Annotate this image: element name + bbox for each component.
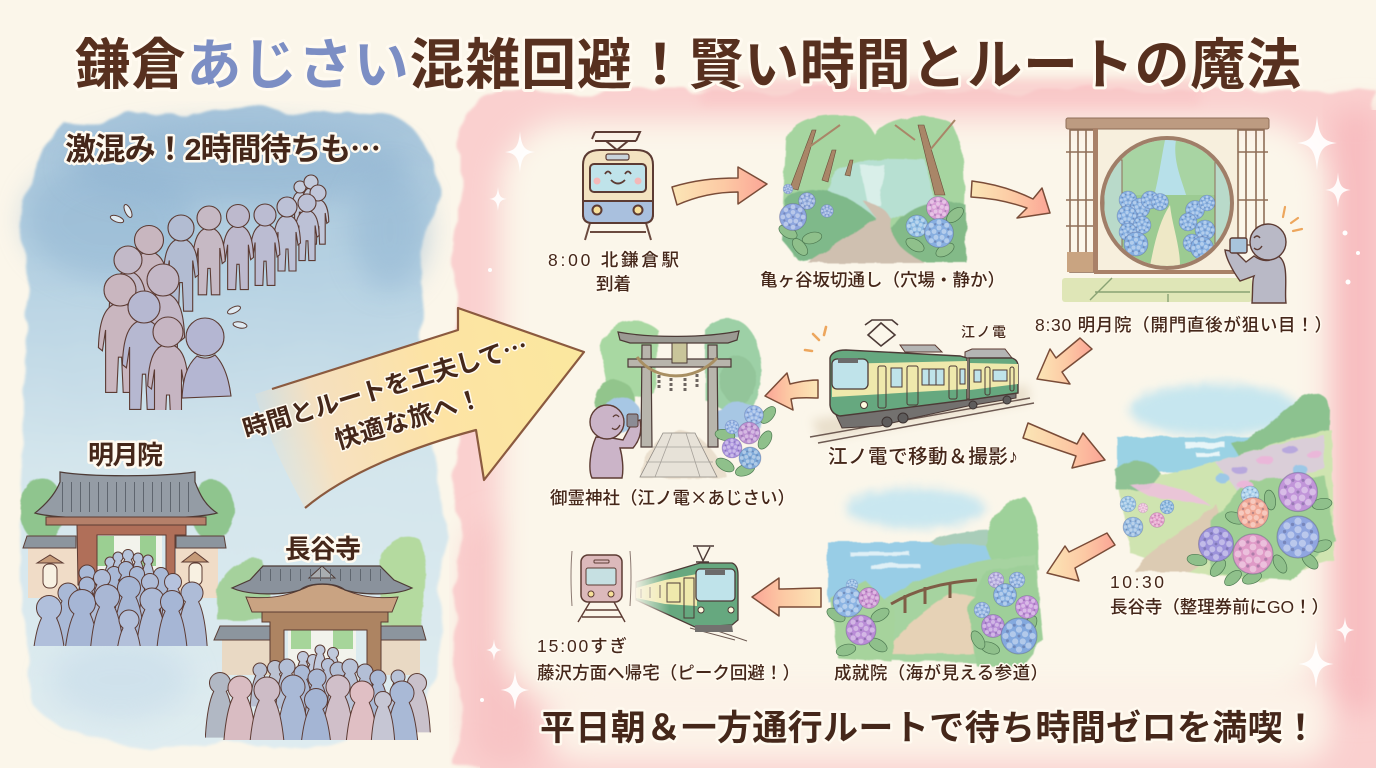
arrow: to Hase-dera bbox=[1023, 423, 1105, 468]
illustration: Hase-dera hydrangea slope bbox=[1115, 384, 1335, 589]
text: Enoden sign: 江ノ電 bbox=[961, 324, 1006, 340]
illustration: Meigetsu-in round window bbox=[1062, 118, 1302, 303]
text: return caption bbox=[537, 636, 800, 683]
arrow: to Kamegayatsu bbox=[672, 167, 767, 205]
text: Meigetsu-in caption: 8:30 明月院（開門直後が狙い目！） bbox=[1035, 315, 1332, 335]
illustration: Kamegayatsu pass bbox=[777, 115, 966, 263]
illustration: Jojuin sea approach bbox=[825, 488, 1043, 668]
heading: crowded warning: 激混み！2時間待ちも… bbox=[65, 124, 381, 169]
panel: pink route frame bbox=[456, 78, 1376, 768]
icon: right lantern bbox=[182, 552, 208, 585]
figure: person photographing bbox=[1225, 224, 1286, 303]
arrow: big transition arrow bbox=[238, 308, 584, 508]
text: Kamegayatsu caption: 亀ヶ谷坂切通し（穴場・静か） bbox=[760, 270, 1005, 290]
text: Enoden caption: 江ノ電で移動＆撮影♪ bbox=[828, 446, 1018, 468]
title: 鎌倉あじさい混雑回避！賢い時間とルートの魔法 bbox=[75, 34, 1301, 96]
figure: person photographing shrine bbox=[590, 405, 641, 478]
illustration: Goryo shrine torii bbox=[590, 319, 779, 479]
arrow: to return trip bbox=[752, 578, 821, 616]
illustration: crowd at Meigetsu-in bbox=[34, 549, 208, 646]
text: Hase-dera caption bbox=[1110, 572, 1329, 617]
text: step 1: 8:00 北鎌倉駅 bbox=[548, 250, 680, 270]
text: Jojuin caption: 成就院（海が見える参道） bbox=[834, 663, 1048, 683]
icon: camera flash ticks bbox=[1283, 207, 1302, 231]
illustration: Enoden train bbox=[805, 320, 1034, 443]
icon: smiling train bbox=[583, 132, 653, 240]
panel: crowded blue wash bbox=[20, 109, 444, 746]
text: Goryo shrine caption: 御霊神社（江ノ電×あじさい） bbox=[550, 485, 795, 510]
arrow: to Meigetsu-in bbox=[971, 181, 1050, 218]
text: bottom conclusion: 平日朝＆一方通行ルートで待ち時間ゼロを満喫！ bbox=[540, 709, 1318, 748]
icon: sweat drops bbox=[109, 203, 247, 329]
text: return caption: 藤沢方面へ帰宅（ピーク回避！） bbox=[537, 663, 800, 683]
text: Hase-dera caption: 長谷寺（整理券前にGO！） bbox=[1110, 597, 1329, 617]
arrow: to Enoden bbox=[1037, 338, 1092, 384]
illustration: Hase-dera gate bbox=[214, 536, 426, 675]
illustration: crowd at Hase-dera bbox=[205, 644, 431, 740]
text: arrow message: 快適な旅へ！ bbox=[332, 385, 485, 455]
decoration: sparkles bbox=[480, 116, 1360, 710]
text: arrow message: 時間とルートを工夫して… bbox=[238, 326, 532, 446]
illustration: green return train bbox=[636, 546, 747, 641]
icon: attention ticks bbox=[805, 327, 826, 351]
label: Hase-dera: 長谷寺 bbox=[285, 534, 361, 564]
illustration: long waiting queue bbox=[98, 175, 329, 428]
text: step 1: 到着 bbox=[596, 274, 631, 294]
icon: left lantern bbox=[37, 555, 63, 588]
text: return caption: 15:00すぎ bbox=[537, 636, 627, 656]
illustration: Meigetsu-in gate bbox=[20, 472, 234, 598]
arrow: to Jojuin bbox=[1047, 533, 1115, 581]
illustration: return trains bbox=[571, 546, 747, 641]
text: Hase-dera caption: 10:30 bbox=[1110, 572, 1164, 592]
illustration: garden through window bbox=[1104, 140, 1233, 270]
arrow: to Goryo shrine bbox=[765, 373, 818, 410]
label: Meigetsu-in: 明月院 bbox=[88, 440, 163, 470]
text: step 1 bbox=[548, 250, 680, 294]
